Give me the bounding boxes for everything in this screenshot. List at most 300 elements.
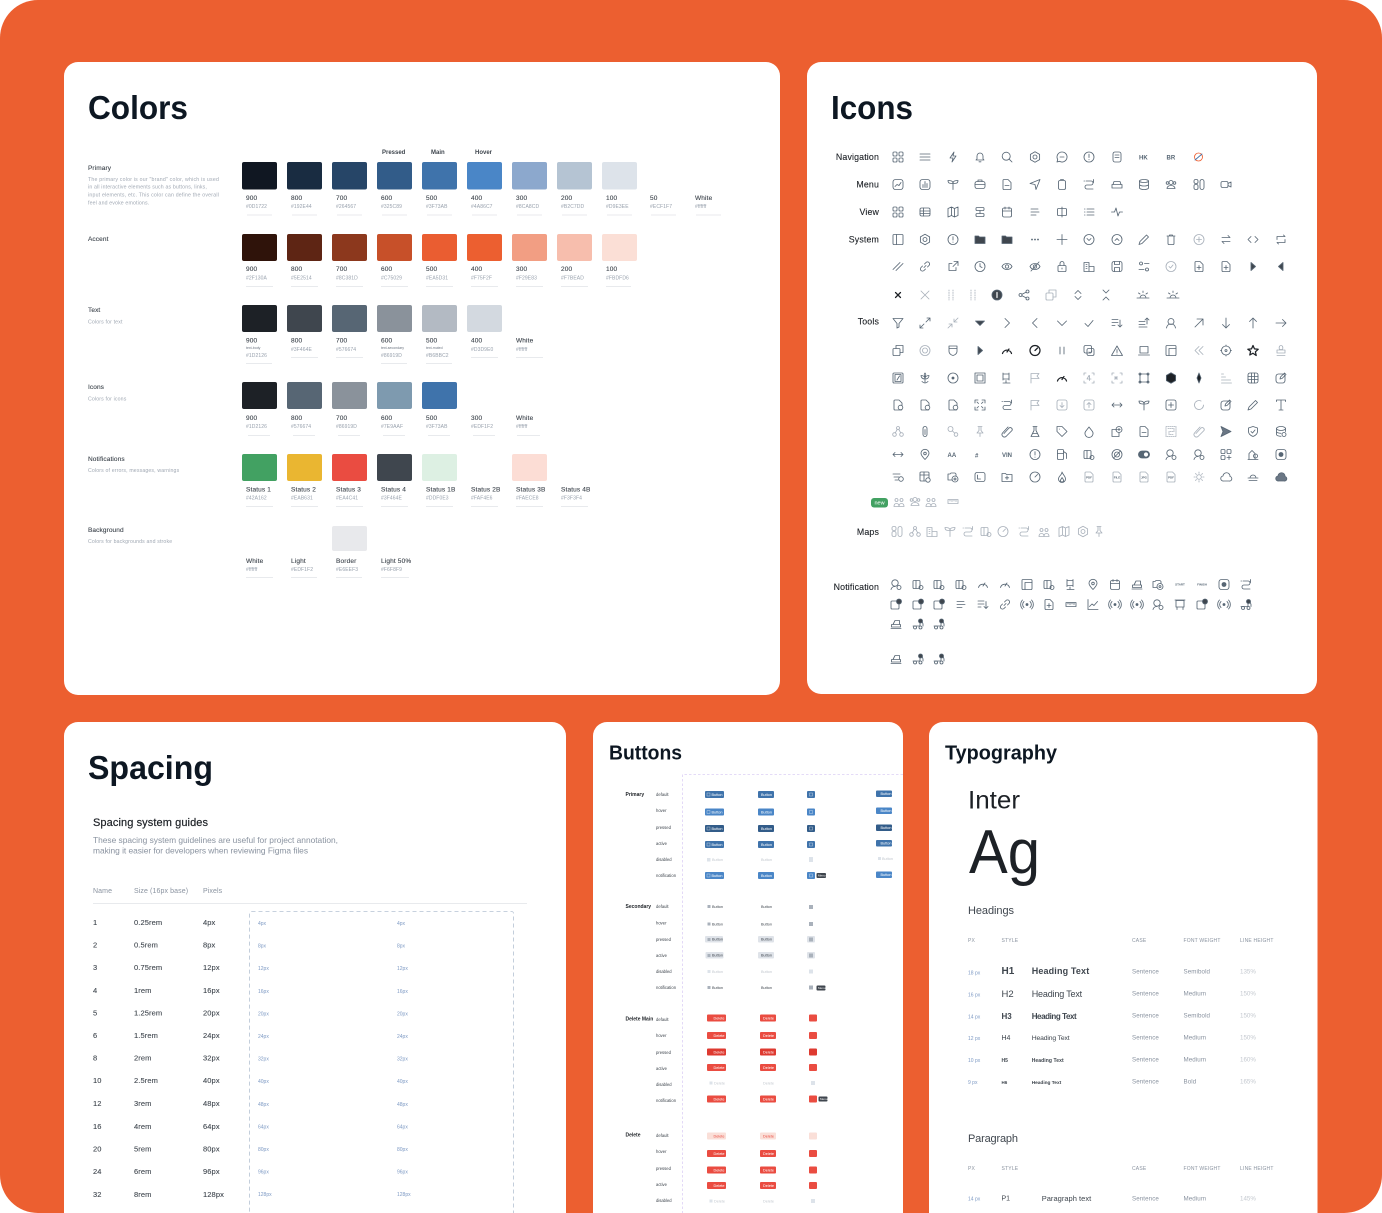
row: text: 800 bbox=[291, 338, 303, 344]
row: text: text-muted bbox=[426, 346, 443, 350]
button group: secondary: Button bbox=[712, 922, 723, 926]
spacing table rows: 128px bbox=[203, 1190, 224, 1199]
row: icons colors: 800 bbox=[291, 415, 303, 422]
dashed spacing sample frame: 48px bbox=[397, 1102, 408, 1108]
row: background: #ffffff bbox=[246, 567, 258, 573]
button group: delete: Delete bbox=[763, 1168, 774, 1172]
button group: delete main: Delete bbox=[714, 1016, 724, 1020]
button group: delete main: Delete bbox=[714, 1098, 724, 1102]
row: text: #576674 bbox=[336, 347, 356, 353]
spacing table rows: 2 bbox=[93, 940, 97, 950]
row: accent: 400 bbox=[471, 266, 483, 273]
spacing table rows: 4rem bbox=[134, 1122, 152, 1131]
headings table rows: 16 px bbox=[968, 992, 981, 998]
icon group labels: System bbox=[849, 234, 879, 244]
row: accent: 900 bbox=[246, 266, 258, 273]
button group: primary: disabled bbox=[656, 857, 672, 862]
spacing table rows: 1rem bbox=[134, 986, 152, 995]
row: accent: 100 bbox=[606, 266, 618, 273]
button group: primary: Button bbox=[882, 857, 893, 861]
headings table rows: Medium bbox=[1184, 990, 1206, 998]
paragraph table: Sentence bbox=[1132, 1196, 1159, 1202]
row: primary: 400 bbox=[471, 195, 483, 202]
row: icons colors: White bbox=[516, 415, 534, 422]
panel: typography bbox=[929, 722, 1318, 1213]
button group: primary: Button bbox=[712, 810, 722, 814]
icon group labels: Menu bbox=[856, 180, 879, 190]
headings table rows: Sentence bbox=[1132, 1078, 1159, 1086]
spacing table rows: 48px bbox=[203, 1099, 220, 1108]
row: primary: #0D1722 bbox=[246, 204, 267, 210]
button group: primary: Button bbox=[712, 793, 722, 797]
spacing table rows: 20px bbox=[203, 1008, 220, 1018]
row: icons colors: 900 bbox=[246, 415, 258, 422]
button group: delete: active bbox=[656, 1182, 668, 1187]
spacing table rows: 16px bbox=[203, 986, 220, 995]
button group: secondary: Button bbox=[761, 954, 772, 958]
icons: notification rows: FINISH bbox=[1197, 582, 1207, 586]
row: accent: 600 bbox=[381, 266, 393, 273]
headings table rows: 165% bbox=[1240, 1078, 1256, 1086]
row: primary: #8CA8CD bbox=[516, 204, 539, 210]
button group: secondary bbox=[626, 904, 826, 990]
spacing table rows: 12 bbox=[93, 1099, 102, 1108]
headings table rows: Heading Text bbox=[1032, 1080, 1062, 1086]
panel: icons bbox=[807, 62, 1317, 694]
row: accent: 300 bbox=[516, 266, 528, 273]
row: text: Text bbox=[88, 307, 100, 314]
row: primary: #B2C7DD bbox=[561, 204, 584, 210]
spacing table rows: 0.25rem bbox=[134, 918, 162, 927]
spacing table rows: 6rem bbox=[134, 1167, 152, 1176]
button group: delete: Delete bbox=[763, 1134, 774, 1138]
spacing table rows: 5rem bbox=[134, 1144, 152, 1154]
headings table rows: Semibold bbox=[1184, 968, 1211, 976]
row: icons colors: #576674 bbox=[291, 424, 311, 430]
headings table rows: Semibold bbox=[1184, 1012, 1211, 1020]
spacing table rows: 20 bbox=[93, 1144, 102, 1154]
spacing table rows: 0.5rem bbox=[134, 940, 158, 950]
row: primary bbox=[88, 162, 721, 215]
headings table rows: Sentence bbox=[1132, 1056, 1159, 1064]
button group: delete main: hover bbox=[656, 1033, 667, 1038]
button group: delete main: Delete Main bbox=[626, 1016, 653, 1022]
button group: primary: default bbox=[656, 792, 669, 797]
dashed frame lines bbox=[682, 774, 903, 1213]
row: notifications: Status 1 bbox=[246, 486, 271, 494]
row: text: White bbox=[516, 338, 534, 344]
row: primary: 50 bbox=[650, 195, 658, 202]
row: primary: The primary color is our "brand" color, which is used bbox=[88, 177, 219, 183]
row: text: 500 bbox=[426, 338, 438, 344]
row: background: Colors for backgrounds and stroke bbox=[88, 539, 172, 545]
button group: secondary: Button bbox=[712, 986, 723, 990]
font sample: Inter Ag bbox=[968, 786, 1040, 887]
badge: new bbox=[871, 498, 888, 508]
headings table rows: H1 bbox=[1002, 966, 1015, 977]
headings table rows: Heading Text bbox=[1032, 1035, 1070, 1042]
dashed spacing sample frame: 24px bbox=[258, 1034, 269, 1040]
spacing table rows: 2rem bbox=[134, 1054, 152, 1062]
spacing table rows: 80px bbox=[203, 1144, 220, 1154]
row: primary: White bbox=[695, 195, 713, 202]
button group: secondary: default bbox=[656, 904, 669, 909]
icons: navigation row: HK bbox=[1139, 156, 1148, 162]
dashed spacing sample frame: 128px bbox=[397, 1192, 411, 1198]
row: text: #86919D bbox=[381, 353, 402, 359]
button group: primary: Button bbox=[880, 792, 891, 796]
button group: primary: Button bbox=[880, 873, 891, 877]
row: primary: feel and evoke emotions. bbox=[88, 200, 149, 206]
headings table rows: Medium bbox=[1184, 1034, 1206, 1042]
button group: primary: hover bbox=[656, 808, 667, 813]
headings table rows: H5 bbox=[1002, 1058, 1008, 1064]
row: text: #3F464E bbox=[291, 347, 313, 353]
row: background: Light 50% bbox=[381, 558, 411, 565]
row: notifications: #EA4C41 bbox=[336, 496, 358, 502]
headings table rows: 10 px bbox=[968, 1058, 981, 1064]
heading: Paragraph: Paragraph bbox=[968, 1133, 1018, 1145]
row: notifications: Colors of errors, messages, warnings bbox=[88, 468, 180, 474]
button group: delete bbox=[626, 1132, 817, 1204]
button group: delete main: disabled bbox=[656, 1082, 672, 1087]
icons: tools rows bbox=[893, 318, 1287, 482]
row: primary: #325C89 bbox=[381, 204, 402, 210]
row: accent: #F29E83 bbox=[516, 276, 537, 282]
row: primary: 500 bbox=[426, 195, 438, 202]
row: icons colors: 600 bbox=[381, 415, 393, 422]
row: notifications: #42A162 bbox=[246, 496, 267, 502]
dashed spacing sample frame: 4px bbox=[397, 921, 406, 927]
button group: delete: Delete bbox=[714, 1168, 724, 1172]
dashed spacing sample frame: 64px bbox=[258, 1124, 269, 1130]
spacing table rows: 1.5rem bbox=[134, 1031, 158, 1040]
row: accent: 200 bbox=[561, 266, 573, 273]
button group: primary: Button bbox=[880, 842, 891, 846]
button group: primary: Button bbox=[761, 810, 772, 814]
button group: primary: Button bbox=[712, 843, 722, 847]
button group: primary: Button bbox=[761, 874, 772, 878]
row: accent: #FBDFD6 bbox=[606, 276, 629, 282]
button group: secondary: Button bbox=[712, 954, 723, 958]
row: text: Colors for text bbox=[88, 320, 123, 326]
row: accent: #C75029 bbox=[381, 276, 402, 282]
subheading and description bbox=[93, 817, 338, 856]
row: primary: #D9E3EE bbox=[606, 204, 629, 210]
headings table header: FONT WEIGHT bbox=[1184, 938, 1221, 944]
button group: delete main: Menu bbox=[820, 1097, 828, 1101]
spacing table header: Name bbox=[93, 888, 112, 895]
row: icons colors: 500 bbox=[426, 415, 438, 422]
row: notifications: #FAECE8 bbox=[516, 496, 539, 502]
button group: delete main: Delete bbox=[763, 1034, 774, 1038]
dashed spacing sample frame: 48px bbox=[258, 1102, 269, 1108]
spacing table rows: 1.25rem bbox=[134, 1008, 162, 1018]
dashed spacing sample frame: 4px bbox=[258, 921, 267, 927]
headings table rows: Sentence bbox=[1132, 990, 1159, 998]
row: text: 700 bbox=[336, 338, 348, 344]
row: accent: 500 bbox=[426, 266, 438, 273]
headings table rows: 150% bbox=[1240, 1012, 1256, 1020]
row: background: #E6EEF3 bbox=[336, 567, 358, 573]
row: notifications: #FAF4E6 bbox=[471, 496, 493, 502]
spacing table rows: 8 bbox=[93, 1054, 97, 1062]
headings table header bbox=[968, 938, 1274, 944]
button group: secondary: hover bbox=[656, 920, 667, 926]
spacing table rows bbox=[93, 918, 224, 1199]
button group: delete: pressed bbox=[656, 1166, 672, 1171]
icons: notification rows: START bbox=[1175, 582, 1185, 586]
headings table rows: Heading Text bbox=[1032, 966, 1089, 976]
row: text: 600 bbox=[381, 338, 393, 344]
row: primary: 600 bbox=[381, 195, 393, 202]
button group: delete main: Delete bbox=[763, 1082, 774, 1086]
headings table rows: H4 bbox=[1002, 1035, 1011, 1042]
panel: colors bbox=[64, 62, 780, 695]
heading: Buttons: Buttons bbox=[609, 742, 682, 764]
button group: delete main: Delete bbox=[763, 1098, 774, 1102]
spacing table rows: 64px bbox=[203, 1122, 220, 1131]
row: text: #B6BBC2 bbox=[426, 353, 449, 359]
row: text: 900 bbox=[246, 338, 258, 344]
button group: secondary: Button bbox=[712, 905, 723, 909]
spacing table rows: 4px bbox=[203, 918, 216, 927]
panel: spacing bbox=[64, 722, 566, 1213]
icons: new row bbox=[894, 498, 958, 506]
row: primary: 700 bbox=[336, 195, 348, 202]
dashed spacing sample frame: 8px bbox=[258, 944, 267, 950]
row: primary: #ECF1F7 bbox=[650, 204, 672, 210]
panel: buttons bbox=[593, 722, 903, 1213]
row: primary: #3F73AB bbox=[426, 204, 448, 210]
row: notifications: Status 4 bbox=[381, 486, 406, 494]
dashed spacing sample frame: 16px bbox=[397, 989, 408, 995]
row: notifications: Status 3B bbox=[516, 486, 546, 494]
icons: tools rows: VIN bbox=[1002, 453, 1012, 459]
button group: delete: Delete bbox=[714, 1184, 724, 1188]
button group: primary: Button bbox=[712, 858, 723, 862]
paragraph table: CASE bbox=[1132, 1166, 1147, 1172]
row: accent bbox=[88, 234, 637, 286]
badge: new: new bbox=[874, 500, 885, 506]
button group: primary: Button bbox=[761, 843, 772, 847]
dashed spacing sample frame: 40px bbox=[258, 1079, 269, 1085]
heading: Headings: Headings bbox=[968, 905, 1014, 917]
spacing table rows: 1 bbox=[93, 918, 97, 927]
dashed spacing sample frame: 96px bbox=[258, 1170, 269, 1176]
spacing table rows: 24 bbox=[93, 1167, 102, 1176]
icons: system rows bbox=[893, 234, 1285, 300]
headings table rows: 9 px bbox=[968, 1080, 978, 1086]
dashed spacing sample frame: 96px bbox=[397, 1170, 408, 1176]
button group: delete main: Delete bbox=[714, 1082, 725, 1086]
spacing table rows: 2.5rem bbox=[134, 1076, 158, 1085]
state labels: Pressed bbox=[382, 150, 406, 156]
dashed spacing sample frame: 32px bbox=[258, 1056, 269, 1062]
spacing table rows: 16 bbox=[93, 1122, 102, 1131]
paragraph table: LINE HEIGHT bbox=[1240, 1166, 1274, 1172]
spacing table header: Size (16px base) bbox=[134, 888, 188, 895]
row: icons colors: #EDF1F2 bbox=[471, 424, 493, 430]
row: notifications: Status 4B bbox=[561, 486, 591, 494]
button group: primary: Menu bbox=[818, 874, 826, 878]
button group: secondary: Button bbox=[761, 970, 772, 974]
dashed spacing sample frame: 128px bbox=[258, 1192, 272, 1198]
state labels bbox=[382, 150, 493, 156]
icons: menu row bbox=[893, 180, 1231, 190]
button group: secondary: Button bbox=[761, 938, 772, 942]
spacing table rows: 24px bbox=[203, 1031, 220, 1040]
headings table header: CASE bbox=[1132, 938, 1147, 944]
button group: secondary: active bbox=[656, 953, 668, 958]
button group: delete main: Delete bbox=[714, 1050, 724, 1054]
subheading and description: making it easier for developers when reviewing Figma files bbox=[93, 846, 308, 856]
button group: delete main: Delete bbox=[763, 1066, 774, 1070]
spacing table rows: 6 bbox=[93, 1031, 97, 1040]
headings table rows: H3 bbox=[1002, 1012, 1012, 1021]
headings table rows: Bold bbox=[1184, 1078, 1197, 1086]
button group: delete main: notification bbox=[656, 1098, 677, 1103]
dashed spacing sample frame: 20px bbox=[397, 1012, 408, 1018]
spacing table rows: 32px bbox=[203, 1054, 220, 1062]
icon group labels: View bbox=[859, 207, 879, 217]
icons: tools rows: PDF bbox=[1168, 476, 1174, 480]
paragraph table: FONT WEIGHT bbox=[1184, 1166, 1221, 1172]
button group: secondary: pressed bbox=[656, 937, 672, 942]
paragraph table: 145% bbox=[1240, 1196, 1256, 1202]
row: primary: 100 bbox=[606, 195, 618, 202]
button group: secondary: Button bbox=[712, 970, 723, 974]
row: notifications: Status 3 bbox=[336, 486, 361, 494]
paragraph table: Medium bbox=[1184, 1196, 1206, 1202]
row: notifications: #3F464E bbox=[381, 496, 403, 502]
dashed spacing sample frame: 32px bbox=[397, 1056, 408, 1062]
button group: primary bbox=[626, 790, 893, 879]
spacing table rows: 3 bbox=[93, 963, 97, 972]
button group: delete: disabled bbox=[656, 1198, 672, 1203]
row: background: Light bbox=[291, 558, 306, 565]
row: background bbox=[88, 526, 411, 578]
icon group labels: Maps bbox=[857, 527, 879, 537]
headings table header: LINE HEIGHT bbox=[1240, 938, 1274, 944]
button group: primary: active bbox=[656, 841, 668, 846]
spacing table rows: 12px bbox=[203, 963, 220, 972]
button group: delete main bbox=[626, 1014, 828, 1103]
row: text: #ffffff bbox=[516, 347, 528, 353]
icons: tools rows: PDF bbox=[1086, 476, 1092, 480]
row: icons colors: Colors for icons bbox=[88, 396, 127, 402]
row: text: 400 bbox=[471, 338, 483, 344]
spacing table rows: 0.75rem bbox=[134, 963, 162, 972]
button group: primary: Button bbox=[712, 874, 722, 878]
button group: delete: Delete bbox=[763, 1152, 774, 1156]
row: background: White bbox=[246, 558, 264, 565]
row: notifications: Notifications bbox=[88, 456, 125, 463]
button group: primary: Button bbox=[761, 793, 772, 797]
icons: tools rows: AA bbox=[948, 453, 957, 459]
headings table header: STYLE bbox=[1002, 938, 1019, 944]
button group: delete: Delete bbox=[763, 1200, 774, 1204]
spacing table rows: 8px bbox=[203, 940, 216, 950]
spacing table header bbox=[93, 888, 527, 904]
row: text: #1D2126 bbox=[246, 353, 267, 359]
button group: delete main: Delete bbox=[763, 1016, 774, 1020]
row: notifications bbox=[88, 454, 591, 506]
button group: delete: default bbox=[656, 1133, 669, 1138]
dashed spacing sample frame: 8px bbox=[397, 944, 406, 950]
headings table rows: Heading Text bbox=[1032, 989, 1083, 999]
heading: Colors: Colors bbox=[88, 89, 188, 126]
dashed spacing sample frame: 16px bbox=[258, 989, 269, 995]
row: primary: Primary bbox=[88, 165, 112, 172]
button group: delete: Delete bbox=[714, 1134, 724, 1138]
row: primary: 800 bbox=[291, 195, 303, 202]
button group: delete: Delete bbox=[714, 1152, 724, 1156]
row: text: text-secondary bbox=[381, 346, 404, 350]
heading: Spacing: Spacing bbox=[88, 749, 213, 786]
row: accent: #EA5D31 bbox=[426, 276, 448, 282]
spacing table header: Pixels bbox=[203, 888, 223, 895]
button group: secondary: Button bbox=[761, 922, 772, 926]
row: text bbox=[88, 305, 543, 364]
spacing table rows: 4 bbox=[93, 986, 97, 995]
button group: secondary: Button bbox=[712, 938, 723, 942]
row: background: Background bbox=[88, 527, 124, 534]
row: primary: 300 bbox=[516, 195, 528, 202]
dashed spacing sample frame bbox=[250, 912, 514, 1213]
headings table rows: 12 px bbox=[968, 1036, 981, 1042]
button group: secondary: Button bbox=[761, 986, 772, 990]
icon group labels: Navigation bbox=[836, 152, 879, 162]
row: primary: 900 bbox=[246, 195, 258, 202]
button group: delete: Delete bbox=[626, 1132, 641, 1138]
button group: delete main: pressed bbox=[656, 1050, 672, 1055]
state labels: Hover bbox=[475, 150, 493, 156]
icons: view row bbox=[893, 207, 1122, 217]
subheading and description: Spacing system guides bbox=[93, 817, 208, 829]
headings table rows: 14 px bbox=[968, 1014, 981, 1020]
spacing table rows: 8rem bbox=[134, 1190, 152, 1199]
row: notifications: #F3F3F4 bbox=[561, 496, 582, 502]
row: accent: #F75F2F bbox=[471, 276, 492, 282]
row: background: #EDF1F2 bbox=[291, 567, 313, 573]
row: background: Border bbox=[336, 558, 357, 565]
row: text: text-body bbox=[246, 346, 261, 350]
dashed spacing sample frame: 12px bbox=[258, 966, 269, 972]
dashed spacing sample frame: 80px bbox=[397, 1147, 408, 1153]
row: notifications: Status 2 bbox=[291, 486, 316, 494]
row: primary: #4A86C7 bbox=[471, 204, 493, 210]
row: text: #D3D9E0 bbox=[471, 347, 493, 353]
row: icons colors: #7E9AAF bbox=[381, 424, 403, 430]
spacing table rows: 3rem bbox=[134, 1099, 152, 1108]
headings table rows: 135% bbox=[1240, 968, 1256, 976]
heading: Typography: Typography bbox=[945, 742, 1058, 764]
heading: Icons: Icons bbox=[831, 89, 913, 126]
row: icons colors: #ffffff bbox=[516, 424, 528, 430]
font sample: Inter Ag: Inter bbox=[968, 786, 1020, 814]
row: icons colors: #1D2126 bbox=[246, 424, 267, 430]
row: notifications: Status 1B bbox=[426, 486, 456, 494]
paragraph table: P1 bbox=[1002, 1196, 1010, 1202]
row: accent: #8C381D bbox=[336, 276, 358, 282]
row: accent: Accent bbox=[88, 236, 109, 243]
icons: tools rows: FILE bbox=[1114, 476, 1120, 480]
headings table rows: 18 px bbox=[968, 970, 981, 976]
button group: delete: Delete bbox=[714, 1200, 725, 1204]
button group: primary: Button bbox=[761, 858, 772, 862]
headings table rows bbox=[968, 966, 1256, 1086]
